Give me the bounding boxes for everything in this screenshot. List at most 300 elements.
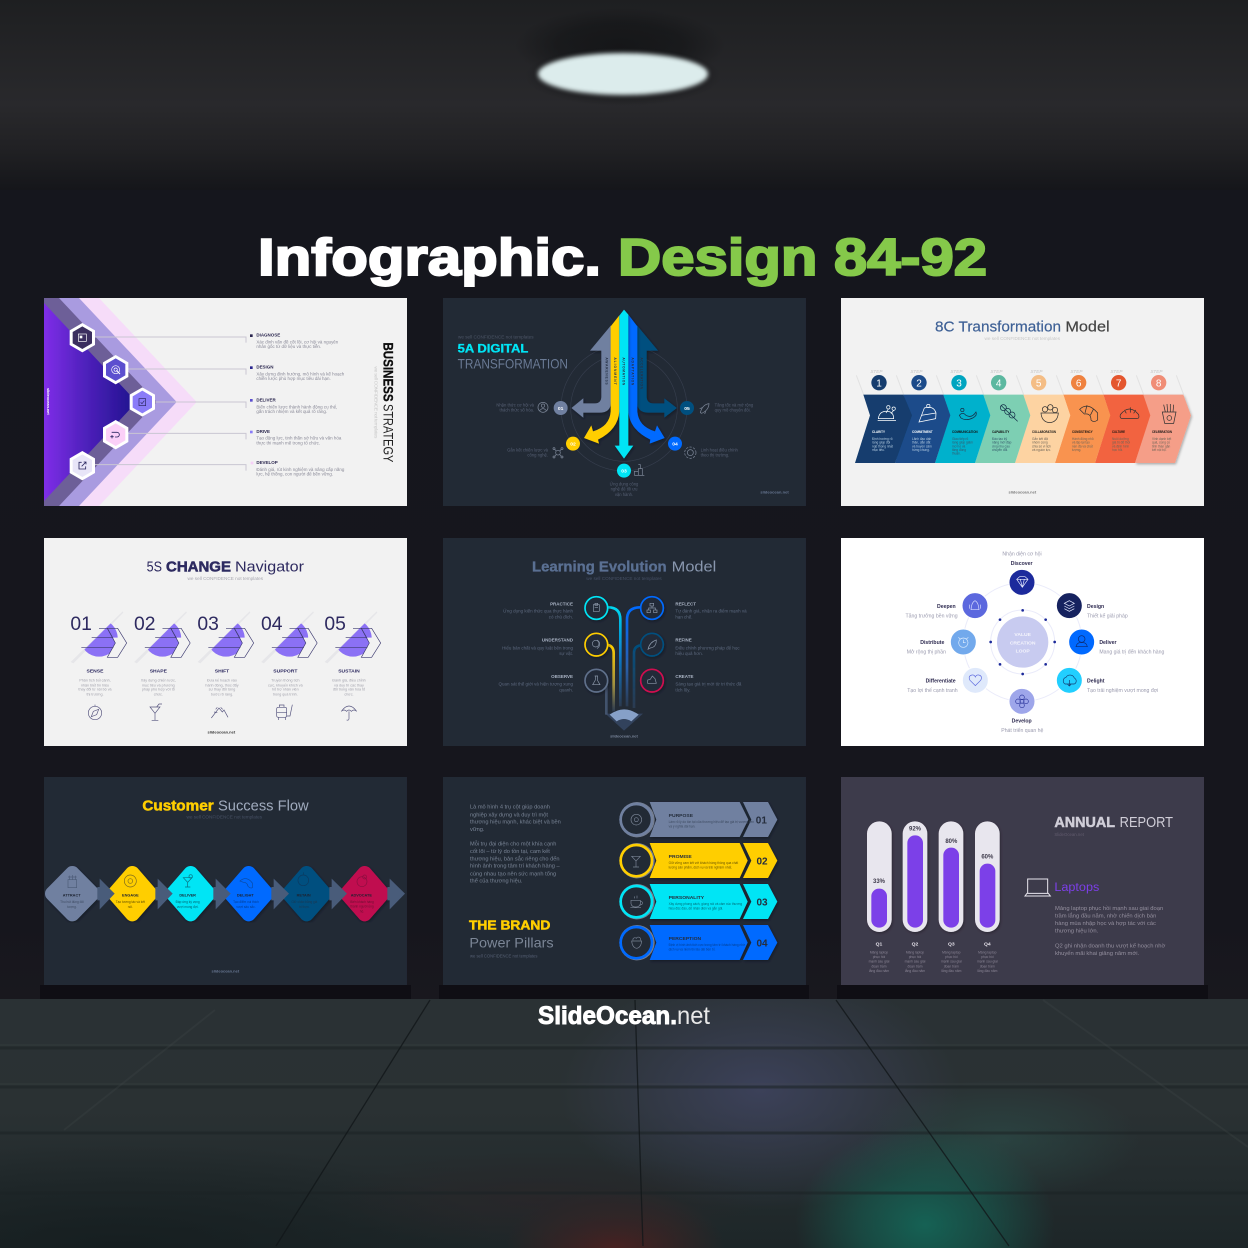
step captions: STEP (910, 369, 923, 374)
pillar: purpose: và ý nghĩa dài hạn. (669, 825, 695, 829)
loop rings (963, 583, 1082, 701)
step descriptions: Phân tích bối cảnh, (79, 679, 111, 683)
title: Infographic. (258, 229, 601, 287)
step list: DIAGNOSE (256, 332, 280, 337)
chevron row (855, 395, 1191, 463)
step descriptions: quả, củng cố (1152, 441, 1170, 445)
step descriptions: cực, khuyến khích và (268, 683, 304, 687)
heading: Navigator (235, 559, 304, 575)
pillar: promise: lượng sản phẩm, dịch vụ và trải nghiệm nhất. (669, 866, 732, 870)
heading: 8C Transformation (935, 319, 1061, 335)
step descriptions: học hỏi. (1112, 448, 1123, 452)
arrows (572, 310, 676, 459)
heading: THE BRAND (469, 918, 551, 933)
right labels (675, 601, 747, 692)
heading (935, 319, 1110, 341)
step numbers: 05 (324, 614, 346, 635)
intro text (470, 805, 561, 885)
node labels: Mang giá trị đến khách hàng (1099, 649, 1165, 655)
step descriptions: và lặp lại tạo (1072, 441, 1090, 445)
connector lines (606, 607, 641, 715)
left labels: Quan sát thế giới và hiện tượng xung (499, 682, 574, 687)
step list: Xác định vấn đề cốt lõi, cơ hội và nguyên (256, 339, 339, 344)
bar chart: Q3 (948, 941, 955, 947)
pillar: purpose: 01 (756, 815, 767, 826)
body text (1055, 906, 1166, 957)
bar captions: lắng đầu năm (905, 968, 925, 973)
step descriptions: ràng giúp giảm (952, 441, 973, 445)
step captions: STEP (870, 369, 883, 374)
left labels: quanh. (559, 687, 573, 692)
food icons (878, 404, 1176, 423)
heading: we sell CONFIDENCE not templates (470, 954, 537, 959)
step descriptions: Hành động nhỏ (1072, 437, 1094, 441)
step list: Xây dựng định hướng, mô hình và kế hoạch (256, 371, 345, 376)
step text: DELIVER (179, 893, 196, 897)
pillar: purpose: PURPOSE (669, 813, 694, 819)
heading: Success Flow (218, 798, 309, 814)
step numbers: 2 (916, 378, 922, 389)
step list: chiến lược phù hợp mục tiêu dài hạn. (256, 376, 331, 381)
intro text: cốt lõi – từ lý do tồn tại, cam kết (470, 849, 550, 855)
bar captions: mạnh sau giai (977, 960, 998, 964)
heading: we sell CONFIDENCE not templates (985, 336, 1061, 341)
node labels: Tạo trải nghiệm vượt mong đợi (1087, 688, 1158, 694)
step numbers: 3 (956, 378, 962, 389)
arrow labels: AWARENESS (604, 357, 608, 385)
heading: ANNUAL (1054, 815, 1115, 831)
step labels (86, 670, 360, 672)
intro text: Là mô hình 4 trụ cột giúp doanh (470, 805, 550, 811)
node labels: Nhận diện cơ hội (1002, 551, 1042, 557)
step descriptions: ngũ thống nhất (872, 444, 893, 448)
heading: Customer (142, 798, 214, 814)
number badges: 05 (684, 406, 690, 412)
step list: Đánh giá, rút kinh nghiệm và nâng cấp năng (256, 467, 345, 472)
right labels: CREATE (675, 674, 693, 679)
pillar: perception: dịch vụ và niềm tin lâu dài bền bỉ. (669, 948, 715, 952)
pillar: perception: 04 (756, 938, 768, 949)
descriptions (496, 403, 754, 497)
number badges: 01 (558, 406, 564, 412)
heading: we sell CONFIDENCE not templates (586, 576, 662, 581)
panel: customer success flow: trị thực. (299, 905, 310, 909)
panel: 5S change navigator (44, 538, 407, 746)
descriptions: Ứng dụng công (610, 482, 639, 487)
step descriptions: Đưa kế hoạch vào (207, 679, 237, 683)
body text: Mảng laptop phục hồi mạnh sau giai đoạn (1055, 906, 1163, 912)
step labels: CULTURE (1112, 429, 1125, 434)
pillar: personality (619, 884, 777, 919)
pillar: promise (619, 843, 777, 878)
step numbers: 6 (1076, 378, 1082, 389)
intro text: vững. (470, 827, 485, 833)
arrow labels: ALIGNMENT (613, 357, 617, 385)
title block: TRANSFORMATION (458, 356, 568, 371)
right labels: tích lũy. (675, 687, 690, 692)
node labels: Develop (1012, 719, 1032, 725)
node labels: Differentiate (926, 679, 956, 685)
bar captions: Mảng laptop (942, 950, 961, 954)
step descriptions: bước rõ ràng. (211, 692, 233, 696)
bar captions: phục hồi (909, 955, 922, 959)
node labels: Deepen (937, 604, 956, 610)
descriptions: quy mô chuyển đổi. (715, 408, 751, 413)
panel: customer success flow: Giữ chân bằng giá (291, 899, 318, 904)
step descriptions: thay đổi từ nội bộ và (78, 688, 113, 692)
step descriptions: nền đà và chất (1072, 444, 1093, 448)
right labels: hạn chế. (675, 615, 693, 620)
laptops heading: Laptops (1054, 880, 1099, 894)
pencil tip (605, 709, 643, 731)
step labels (872, 430, 1172, 433)
step descriptions: Truyền thông tích (271, 679, 299, 683)
intro text: Mỗi trụ đại diện cho một khía cạnh (470, 840, 556, 847)
body text: hàng mùa nhập học và hợp tác với các (1055, 921, 1156, 927)
step labels: CONSISTENCY (1072, 429, 1093, 434)
panel: customer success flow: Đáp ứng kỳ vọng (176, 900, 200, 904)
heading: 5S (147, 559, 162, 575)
node labels: Discover (1011, 561, 1033, 567)
left labels: Ứng dụng kiến thức qua thực hành (503, 608, 574, 614)
heading: we sell CONFIDENCE not templates (187, 815, 263, 820)
step text (63, 893, 372, 897)
step descriptions: trong quá trình. (273, 692, 298, 696)
step descriptions: và định hình (1112, 444, 1129, 448)
descriptions: Tăng tốc và mở rộng (715, 403, 754, 408)
step descriptions: sự thay đổi từng (209, 688, 235, 692)
panel: customer success flow: Tạo điểm vui thích (233, 900, 259, 904)
step descriptions: Xây dựng chiến lược, (141, 679, 176, 683)
pillar: perception: PERCEPTION (669, 936, 701, 942)
step descriptions: ứng nhu cầu (992, 444, 1010, 448)
step icons (68, 872, 367, 888)
descriptions: Nhận thức cơ hội và (496, 403, 535, 408)
step numbers (71, 616, 346, 630)
step descriptions: mục tiêu. (872, 448, 885, 452)
step descriptions: ràng giúp đội (872, 441, 891, 445)
panel: customer success flow: tượng. (67, 905, 77, 909)
diamond steps (52, 873, 382, 914)
bar captions: đoạn trầm (907, 964, 923, 968)
step numbers: 01 (70, 614, 92, 635)
step numbers: 7 (1116, 378, 1122, 389)
step labels: SENSE (87, 669, 104, 675)
step captions: STEP (950, 369, 963, 374)
step descriptions: Nuôi dưỡng (1112, 437, 1129, 441)
step tabs (856, 375, 1184, 395)
bar captions: mạnh sau giai (941, 960, 962, 964)
connector lines (94, 337, 246, 471)
step list: nhân gốc từ dữ liệu và thực tiễn. (256, 343, 321, 349)
step captions: STEP (1150, 369, 1163, 374)
floor (0, 999, 1248, 1248)
step descriptions: mơ hồ và (952, 444, 966, 448)
step descriptions: tinh thần gắn (1152, 443, 1170, 448)
center hub (997, 616, 1048, 668)
panel: annual report (841, 777, 1204, 985)
loop nodes (950, 569, 1095, 714)
step numbers: 5 (1036, 378, 1042, 389)
step text: ADVOCATE (351, 893, 372, 897)
descriptions: vận hành. (615, 492, 633, 497)
step labels: SUPPORT (273, 669, 297, 675)
heading: Power Pillars (469, 934, 554, 950)
hub dots (989, 609, 1056, 675)
bar chart: Q4 (984, 941, 991, 947)
intro text: nghiệp xây dựng và duy trì một (470, 812, 548, 818)
step descriptions: thuận. (952, 452, 961, 456)
bar captions (869, 950, 998, 973)
left labels: sự vật. (559, 651, 573, 656)
step descriptions: Giao tiếp rõ (952, 437, 969, 441)
bar captions: phục hồi (981, 955, 994, 959)
left labels (499, 601, 574, 692)
logo: slideocean.net (211, 969, 240, 974)
heading: we sell CONFIDENCE not templates (188, 576, 264, 581)
heading (142, 798, 309, 820)
body text: thương hiệu lớn. (1055, 929, 1099, 935)
node labels: Phát triển quan hệ (1001, 727, 1044, 734)
step descriptions: lượng. (1072, 448, 1081, 452)
step descriptions: thị trường. (86, 692, 104, 696)
node labels (906, 551, 1165, 734)
bar captions: đoạn trầm (871, 964, 887, 968)
node circles (585, 597, 663, 692)
step numbers: 04 (261, 614, 283, 635)
logo: slideocean.net (207, 730, 236, 735)
node labels: Tạo lợi thế cạnh tranh (907, 688, 958, 694)
center hub: CREATION (1010, 640, 1036, 646)
node icons (958, 577, 1087, 708)
step list: DEVELOP (256, 460, 278, 465)
panel: customer success flow: hộ. (360, 909, 364, 913)
step graphics (71, 611, 381, 663)
step descriptions: chuyển đổi. (992, 448, 1008, 452)
pillar: purpose (619, 802, 777, 837)
title block (458, 335, 567, 368)
pillar: perception: Định vị hình ảnh tích cực trong tâm trí khách hàng nhờ (669, 943, 745, 947)
step descriptions: Đánh giá, điều chỉnh (332, 679, 366, 683)
left labels: UNDERSTAND (542, 638, 574, 643)
descriptions: công nghệ. (527, 453, 548, 458)
step descriptions: Lãnh đạo dấn (912, 437, 932, 441)
title: Design 84-92 (618, 229, 987, 287)
heading: CHANGE (166, 559, 231, 575)
body text: trầm lắng đầu năm, nhờ chiến dịch bán (1055, 913, 1156, 920)
step descriptions: chia sẻ vì lịch (1032, 444, 1051, 448)
pillar: promise: PROMISE (669, 854, 692, 860)
descriptions: Gắn kết chiến lược và (507, 447, 549, 452)
step labels: CAPABILITY (992, 429, 1010, 434)
pillar: perception (619, 925, 777, 960)
logo: slideocean.net (760, 490, 789, 495)
step numbers: 02 (134, 614, 155, 635)
bar captions: mạnh sau giai (869, 960, 890, 964)
footer brand: SlideOcean. (538, 1002, 677, 1030)
panel: learning evolution model (443, 538, 806, 746)
step text: DELIGHT (237, 893, 254, 897)
step descriptions: và nguồn lực. (1032, 448, 1051, 452)
pillar: personality: 03 (756, 897, 768, 908)
logo: slideocean.net (1008, 490, 1037, 495)
arrow labels: ACCELERATION (639, 357, 643, 390)
step descriptions: tăng đồng (952, 448, 966, 452)
step numbers: 4 (996, 378, 1002, 389)
step list (250, 332, 345, 477)
vertical title: BUSINESS (380, 342, 396, 402)
bar captions: phục hồi (873, 955, 886, 959)
descriptions: theo thị trường. (701, 453, 729, 458)
orbit rings (561, 345, 687, 471)
step descriptions: giá trị để thói (1112, 441, 1130, 445)
step list: Biến chiến lược thành hành động cụ thể, (256, 403, 337, 409)
bar captions: phục hồi (945, 955, 958, 959)
right labels: Sáng tạo giá trị mới từ tri thức đã (675, 682, 742, 687)
descriptions: thách thức số hóa. (500, 408, 534, 413)
step captions: STEP (990, 369, 1003, 374)
panel shadows (40, 985, 1208, 999)
step text: ATTRACT (63, 893, 81, 897)
right labels: Tự đánh giá, nhận ra điểm mạnh và (675, 608, 747, 614)
step labels: CLARITY (872, 429, 885, 434)
step descriptions: Đào tạo kỹ (992, 437, 1008, 441)
body text: khuyến mãi khai giảng năm mới. (1055, 951, 1140, 957)
bar captions: Mảng laptop (978, 950, 997, 954)
node labels: Deliver (1099, 640, 1117, 646)
panel: customer success flow (44, 777, 407, 985)
node labels: Thiết kế giải pháp (1087, 613, 1128, 619)
bar chart: Q1 (876, 941, 883, 947)
bar chart: 92% (909, 827, 922, 833)
bar captions: Mảng laptop (906, 950, 924, 954)
step list: DELIVER (256, 397, 277, 402)
panel: customer success flow: Biến khách hàng (350, 900, 374, 904)
panel: customer success flow: nối. (128, 905, 133, 909)
step list: DRIVE (256, 429, 270, 434)
pillar: personality: PERSONALITY (669, 895, 705, 901)
right labels: hiệu quả hơn. (675, 651, 703, 656)
step descriptions (78, 679, 366, 696)
flow arrows (97, 879, 405, 909)
step descriptions: hỗ trợ nhân viên (272, 687, 299, 692)
left labels: có chủ đích. (549, 614, 573, 620)
step captions (870, 370, 1162, 373)
arrow labels: ADAPTATION (630, 357, 634, 386)
number badges: 04 (672, 442, 678, 448)
node labels: Delight (1087, 679, 1105, 685)
intro text: thương hiệu, bản sắc riêng cho đến (470, 855, 560, 862)
bar captions: lắng đầu năm (941, 968, 962, 973)
step labels: COLLABORATION (1032, 429, 1056, 434)
bar captions: lắng đầu năm (977, 968, 998, 973)
panel: customer success flow: vượt sâu sắc. (236, 904, 256, 909)
step list: Tạo động lực, tinh thần sở hữu và văn hóa (256, 435, 342, 441)
panel: brand power pillars (443, 777, 806, 985)
content band (0, 190, 1248, 999)
step descriptions: chức. (344, 692, 354, 696)
left labels: PRACTICE (550, 601, 573, 606)
step descriptions: Gắn kết đội (1032, 436, 1048, 441)
step list: thực thi mạnh mẽ trong tổ chức. (256, 439, 320, 445)
step list: gắn trách nhiệm và kết quả rõ ràng. (256, 408, 327, 414)
node labels: Design (1087, 604, 1104, 610)
right labels: Điều chỉnh phương pháp để học (675, 644, 740, 650)
heading: Model (1065, 319, 1110, 335)
bar chart: 33% (873, 879, 886, 885)
step descriptions: Vinh danh kết (1152, 437, 1171, 441)
heading: SlideOcean.net (1054, 832, 1085, 837)
right labels: REFLECT (675, 601, 696, 606)
title block: 5A DIGITAL (458, 341, 529, 355)
step descriptions: Định hướng rõ (872, 437, 893, 441)
ceiling lamp (515, 8, 725, 106)
step labels: COMMITMENT (912, 429, 933, 434)
vertical title: slideocean.net (46, 388, 51, 415)
step list: DESIGN (256, 364, 274, 369)
step descriptions: đổi trong văn hóa tổ (333, 688, 365, 692)
arrow labels: AUTOMATION (622, 357, 626, 386)
intro text: thương hiệu mạnh, khác biệt và bền (470, 820, 561, 826)
step numbers (871, 375, 1166, 390)
step text: RETAIN (297, 893, 311, 897)
step descriptions: chức. (154, 692, 163, 696)
descriptions: Linh hoạt điều chỉnh (701, 448, 739, 453)
step descriptions: mục tiêu và phương (142, 683, 175, 687)
pillar: promise: 02 (756, 856, 768, 867)
arrow labels (604, 357, 643, 390)
step labels: SHIFT (215, 669, 229, 675)
left labels: OBSERVE (551, 674, 573, 679)
ceiling background (0, 0, 1248, 190)
number badges: 02 (570, 442, 576, 448)
pillar: personality: Xây dựng phong cách, giọng nói và cảm xúc thương (669, 902, 742, 906)
step labels: SHAPE (150, 669, 168, 675)
step labels: COMMUNICATION (952, 429, 978, 434)
step descriptions: nhận biết tín hiệu (81, 683, 109, 687)
step text: ENGAGE (122, 893, 139, 897)
step list: lực, hệ thống, con người để bền vững. (256, 471, 333, 477)
footer brand: net (677, 1002, 710, 1030)
bar captions: lắng đầu năm (869, 968, 889, 973)
step descriptions: và duy trì các thay (334, 683, 364, 687)
center hub: VALUE (1014, 632, 1032, 638)
step descriptions: pháp phù hợp với tổ (142, 688, 175, 692)
step descriptions: nhóm cùng (1032, 441, 1048, 445)
title block: we sell CONFIDENCE not templates (458, 334, 534, 339)
heading: REPORT (1120, 815, 1173, 831)
step descriptions: thân, dẫn dắt (912, 440, 931, 445)
step numbers: 8 (1156, 378, 1162, 389)
descriptions: nghệ để tối ưu (611, 487, 638, 492)
heading: Learning Evolution (532, 559, 667, 575)
icon: laptop (1025, 879, 1050, 896)
heading: Model (672, 559, 716, 575)
left labels: Hiểu bản chất và quy luật bên trong (502, 644, 573, 650)
node labels: Distribute (920, 640, 944, 646)
bar captions: Mảng laptop (870, 950, 888, 954)
center hub: LOOP (1016, 649, 1030, 655)
heading (469, 918, 554, 959)
panel: customer success flow: vượt mong đợi. (177, 905, 199, 909)
pillar: promise: Giữ vững cam kết với khách hàng thông qua chất (669, 861, 738, 865)
intro text: thể của thương hiệu. (470, 878, 523, 885)
panel: value creation loop (841, 538, 1204, 746)
hexagon steps (70, 323, 155, 480)
step descriptions: hành động, thúc đẩy (205, 683, 239, 687)
step labels: CELEBRATION (1152, 429, 1172, 434)
step numbers: 1 (876, 378, 882, 389)
